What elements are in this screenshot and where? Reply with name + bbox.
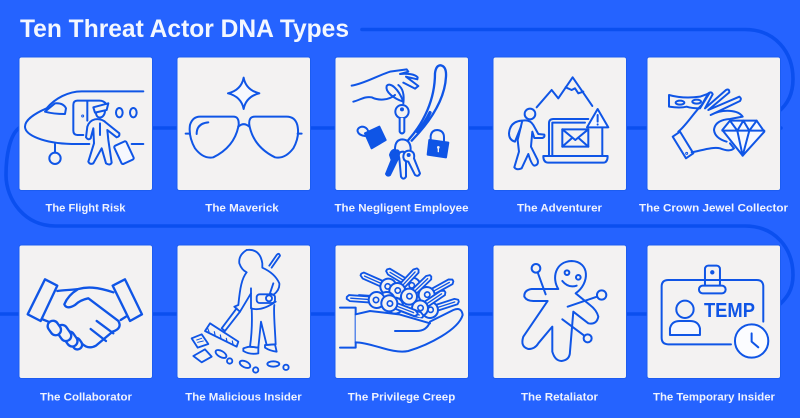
panel: The Privilege Creep [335,245,468,404]
icon: hand holding many keys [340,263,463,352]
label: The Maverick [205,202,280,214]
card [493,57,626,190]
card [647,57,780,190]
label: The Crown Jewel Collector [639,202,789,214]
label: The Adventurer [517,202,603,214]
panel: The Flight Risk [19,57,152,214]
label: The Privilege Creep [348,392,456,404]
icon: pilot leaving airplane [25,91,143,165]
card [335,57,468,190]
panel: The Temporary Insider [647,245,780,404]
label: The Malicious Insider [185,392,302,404]
icon: hooded figure sweeping footprints [192,250,289,373]
panel: The Collaborator [19,245,152,404]
panel: The Adventurer [493,57,626,214]
icon: temp ID badge with clock: TEMP [704,299,755,322]
connector line [0,30,793,314]
panel: The Retaliator [493,245,626,404]
label: The Negligent Employee [334,202,468,214]
panel: The Crown Jewel Collector [639,57,789,214]
icon: hand holding diamond with mask [669,90,764,158]
icon: aviator glasses and sparkle [186,78,302,158]
panel: The Malicious Insider [177,245,310,404]
panel: The Negligent Employee [334,57,468,214]
label: The Flight Risk [46,202,126,214]
card [177,245,310,378]
icon: handshake [28,279,142,351]
card [177,57,310,190]
card [19,57,152,190]
card [335,245,468,378]
label: The Retaliator [521,392,599,404]
icon: hand with keys, lanyard and locks [352,65,448,179]
icon: voodoo doll with pins [522,261,606,361]
card [19,245,152,378]
label: The Collaborator [40,392,133,404]
icon: hiker, mountain, laptop and warning [509,77,608,169]
title: Ten Threat Actor DNA Types [20,15,349,43]
icon: temp ID badge with clock [662,266,768,358]
label: The Temporary Insider [653,392,776,404]
card [647,245,780,378]
panel: The Maverick [177,57,310,214]
card [493,245,626,378]
